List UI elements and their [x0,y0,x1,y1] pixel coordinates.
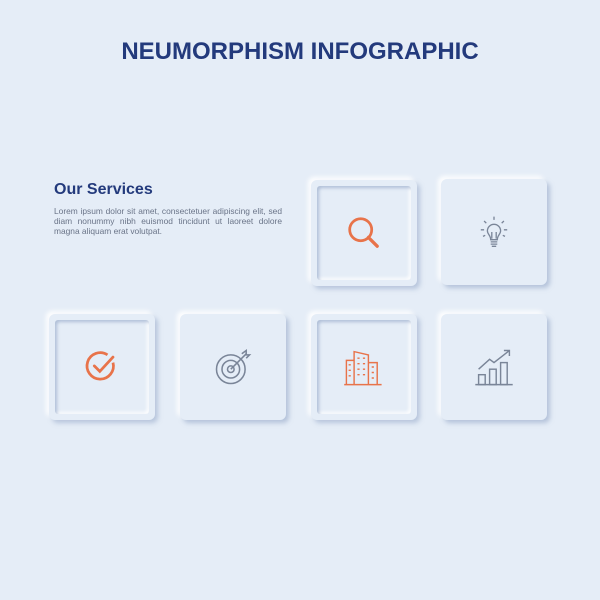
card: target [180,314,286,420]
icon: check circle [86,351,115,380]
icon: buildings [344,350,382,386]
card: check [49,314,155,420]
card: building [311,314,417,420]
icon: magnifier [348,217,379,248]
text block: our services: Lorem ipsum dolor sit amet, consectetuer adipiscing elit, sed diam nonummy nibh euismod tincidunt ut laoreet dolore magna aliquam erat volutpat. [54,206,282,236]
icon: bar chart with arrow [475,350,513,386]
icon: light bulb [480,216,508,247]
text block: our services [54,181,282,236]
card: growth chart [441,314,547,420]
card: search [311,180,417,286]
title: NEUMORPHISM INFOGRAPHIC [121,38,479,65]
text block: our services: Our Services [54,181,153,198]
icon: target [216,349,252,384]
card: idea [441,179,547,285]
